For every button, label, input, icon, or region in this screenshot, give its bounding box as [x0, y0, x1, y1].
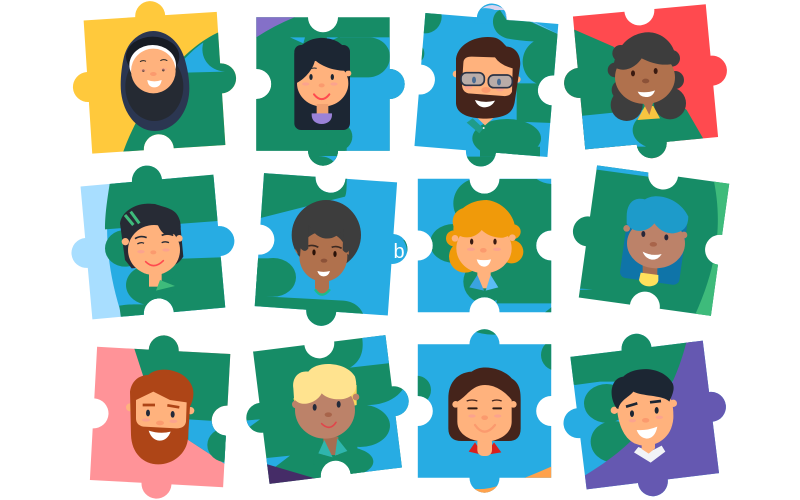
puzzle piece: woman with brown bob [418, 329, 552, 493]
puzzle piece: man with red beard [90, 335, 230, 499]
puzzle piece: woman with long black hair [253, 13, 410, 171]
portrait: winking woman with hair clips [120, 204, 183, 291]
piece background: pink, green and blue [90, 335, 230, 499]
portrait: woman with brown bob [448, 367, 521, 456]
piece background: blue, green and lavender [414, 4, 558, 166]
piece background: blue and green [417, 177, 553, 313]
piece background: red, green and blue [564, 4, 727, 158]
portrait: man with blond hair [292, 364, 359, 457]
piece background: blue with green and orange accents [418, 329, 552, 493]
piece background: green, blue and purple [564, 334, 726, 496]
piece background: yellow and green [70, 0, 240, 157]
puzzle piece: winking woman with hair clips [72, 166, 234, 320]
piece background: blue, green and purple [253, 13, 410, 171]
puzzle piece: woman with blue hair [572, 165, 730, 316]
text: letter b on puzzle tab: b [394, 241, 405, 263]
piece background: green, blue and dark purple [246, 335, 409, 484]
piece background: green with light green edge [572, 165, 730, 316]
portrait: woman with curly dark hair [608, 32, 686, 121]
puzzle piece: man with blond hair [246, 335, 409, 484]
portrait: woman with long black hair [294, 38, 351, 130]
portrait: bearded man with glasses [453, 37, 521, 133]
puzzle piece: woman with orange curly hair [417, 177, 553, 313]
puzzle piece: woman with curly dark hair [564, 4, 727, 158]
piece background: light blue, green and blue [72, 166, 234, 320]
puzzle piece: man with afro [254, 173, 408, 326]
portrait: woman in hijab [121, 31, 189, 131]
puzzle piece: woman in hijab [70, 0, 240, 157]
piece background: blue and green [254, 173, 408, 326]
portrait: man with black hair and white collar [611, 369, 677, 463]
portrait: woman with blue hair [619, 196, 688, 286]
puzzle piece: man with black hair and white collar [564, 334, 726, 496]
portrait: woman with orange curly hair [446, 200, 523, 291]
portrait: man with afro [292, 200, 361, 295]
puzzle piece: bearded man with glasses [414, 4, 558, 166]
portrait: man with red beard [126, 370, 194, 464]
